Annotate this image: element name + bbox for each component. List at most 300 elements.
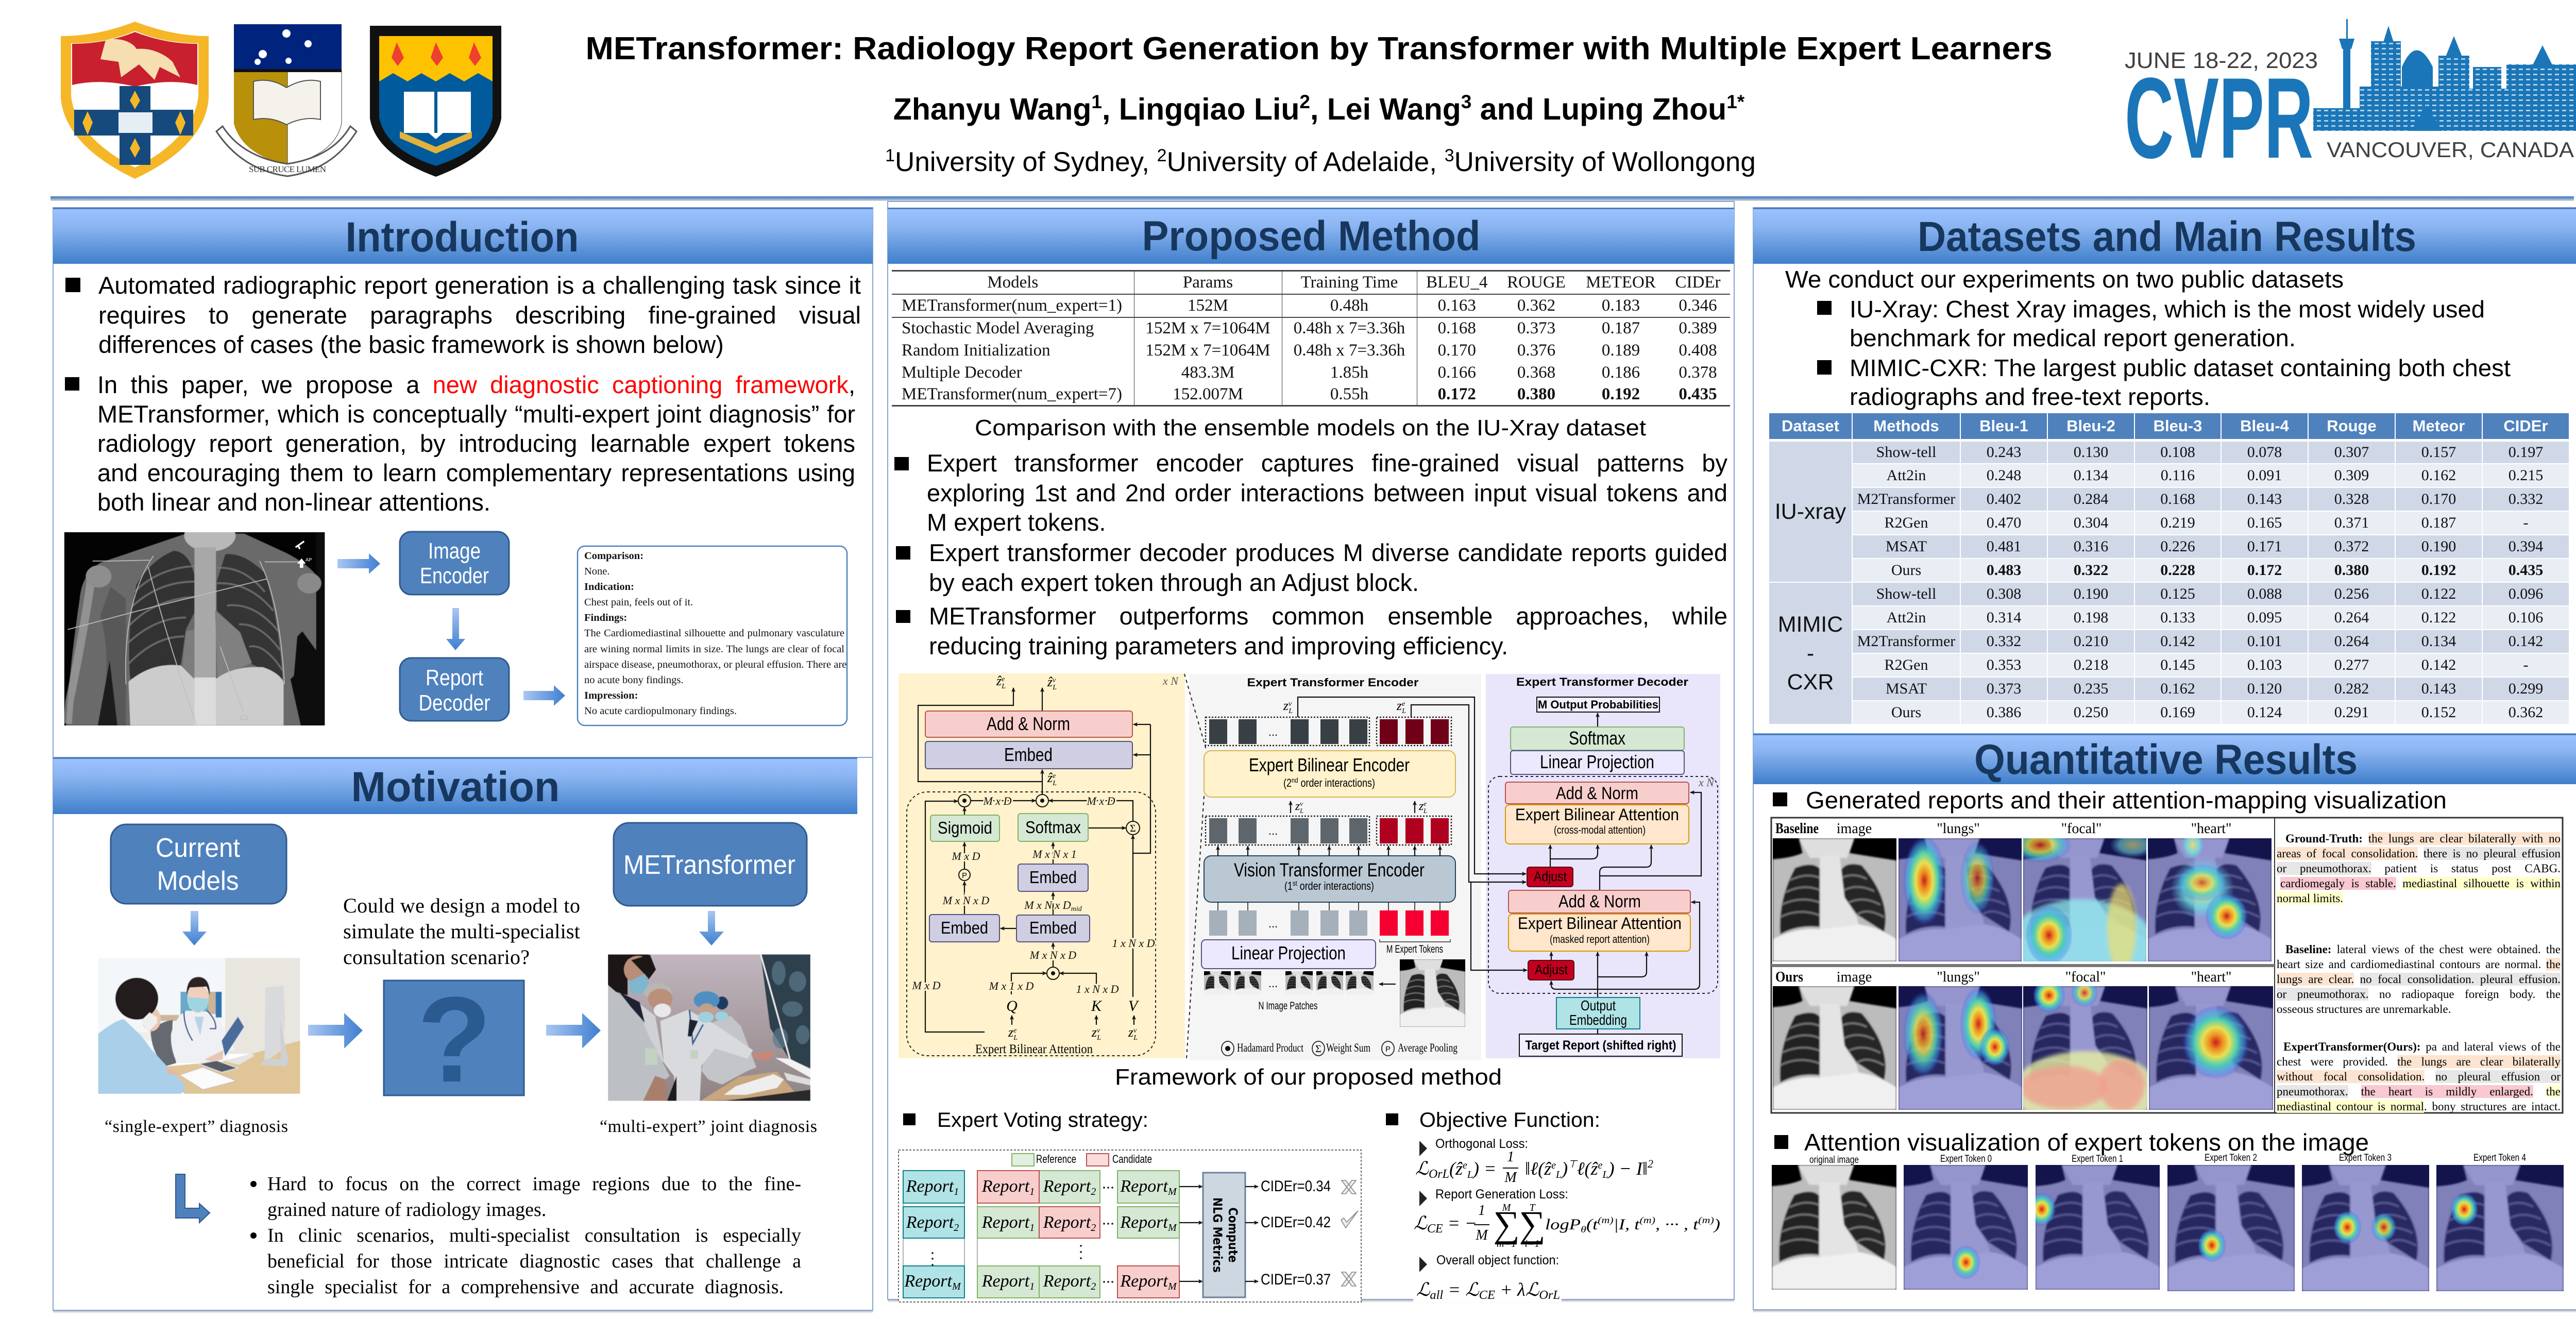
panel: Expert Bilinear Attention detail: z bbox=[1128, 1025, 1133, 1040]
table: main results: 0.171 bbox=[2247, 538, 2282, 555]
formula: orthogonal loss: ) = bbox=[1472, 1158, 1496, 1179]
table: main results: Ours bbox=[1891, 704, 1921, 721]
heatmap: ours focal bbox=[2013, 978, 2158, 1128]
panel: Expert Transformer Encoder: M Expert Tokens bbox=[1386, 943, 1443, 955]
table: main results: 0.130 bbox=[2074, 444, 2108, 461]
text block: problem statement: Automated radiographic report generation is a challenging task since it bbox=[98, 272, 861, 299]
table: ensemble comparison: 0.435 bbox=[1679, 385, 1717, 403]
text: ours report: pneumothorax. the heart is mildly enlarged. the bbox=[2277, 1085, 2561, 1098]
table: main results: 0.386 bbox=[1987, 704, 2021, 721]
table: main results: Methods bbox=[1873, 417, 1939, 435]
table: ensemble comparison: 0.186 bbox=[1602, 363, 1640, 381]
formula: report generation loss: , ··· , t bbox=[1655, 1216, 1699, 1233]
box: unknown model question mark bbox=[384, 972, 524, 1108]
table: main results: R2Gen bbox=[1885, 656, 1928, 673]
table: ensemble comparison: 0.373 bbox=[1517, 319, 1555, 337]
table: main results: 0.228 bbox=[2160, 562, 2195, 579]
figure: expert token attention: Expert Token 2 bbox=[2205, 1153, 2257, 1163]
text: ground-truth report: or pneumothorax. patient is status post CABG. bbox=[2277, 862, 2561, 875]
text: ours report: without focal consolidation. no pleural effusion or bbox=[2277, 1070, 2561, 1083]
panel: Expert Transformer Encoder: z bbox=[1295, 800, 1300, 813]
table: ensemble comparison: METransformer(num_expert=7) bbox=[902, 385, 1122, 403]
text: intro sentence: We conduct our experiments on two public datasets bbox=[1785, 266, 2344, 293]
formula: report generation loss: ∑ bbox=[1493, 1204, 1520, 1245]
text block: proposal: and encouraging them to learn complementary representations using bbox=[97, 459, 855, 486]
panel: Introduction bbox=[53, 208, 873, 757]
heading: Datasets and Main Results: Datasets and Main Results bbox=[1918, 213, 2416, 260]
panel: Expert Transformer Encoder: L bbox=[1288, 707, 1293, 715]
box: Current Models: Models bbox=[157, 866, 239, 896]
affiliations: University of Adelaide, bbox=[1167, 147, 1445, 177]
box: Image Encoder: Image bbox=[428, 538, 481, 564]
text: baseline report: Baseline: lateral views of the chest were obtained. the bbox=[2285, 943, 2561, 956]
table: main results: 0.308 bbox=[1987, 585, 2021, 602]
heading: Proposed Method bbox=[888, 208, 1734, 264]
bullet icon bbox=[1773, 792, 1787, 806]
panel: Expert Bilinear Attention detail: x N bbox=[1162, 674, 1179, 687]
text block: proposal: radiology report generation, by introducing learnable expert tokens bbox=[97, 430, 855, 457]
diagram: expert voting: M bbox=[952, 1281, 961, 1292]
table: main results: IU-xray bbox=[1775, 499, 1846, 524]
table: main results: 0.197 bbox=[2509, 444, 2543, 461]
table: main results: 0.248 bbox=[1987, 467, 2021, 484]
table: main results: Ours bbox=[1891, 562, 1921, 579]
text block: problem statement: differences of cases (the basic framework is shown below) bbox=[98, 331, 724, 358]
heatmap: baseline lungs bbox=[1899, 838, 2022, 961]
table: main results: 0.125 bbox=[2160, 585, 2195, 602]
authors: , Lei Wang bbox=[1310, 92, 1461, 126]
formula: overall: OrL bbox=[1539, 1289, 1560, 1302]
table: ensemble comparison: Stochastic Model Averaging bbox=[902, 319, 1094, 337]
panel: Expert Transformer Encoder: ... bbox=[1268, 824, 1278, 837]
panel: Expert Transformer Encoder: Weight Sum bbox=[1326, 1041, 1370, 1054]
table: ensemble comparison: 0.48h x 7=3.36h bbox=[1294, 341, 1405, 360]
text: baseline report: lungs are clear. no focal consolidation. pleural effusion. bbox=[2277, 973, 2561, 986]
text block: expert decoder: Expert transformer decoder produces M diverse candidate reports guided bbox=[929, 539, 1727, 566]
formula: orthogonal loss bbox=[1415, 1149, 1653, 1186]
panel: Expert Bilinear Attention detail: e bbox=[1002, 675, 1005, 683]
table: main results: 0.145 bbox=[2160, 656, 2195, 673]
heading: Introduction: Introduction bbox=[345, 214, 579, 261]
text block: proposal: In this paper, we propose a new diagnostic captioning framework, bbox=[97, 371, 855, 398]
text block: IU-Xray: benchmark for medical report generation. bbox=[1850, 325, 2296, 351]
panel: Expert Transformer Decoder: Expert Bilinear Attention bbox=[1515, 805, 1679, 824]
heatmap: expert token 0 bbox=[1904, 1165, 2028, 1290]
table: ensemble comparison: 0.172 bbox=[1438, 385, 1476, 403]
panel: Expert Transformer Decoder: Expert Transformer Decoder bbox=[1516, 675, 1688, 688]
title: METransformer: Radiology Report Generation by Transformer with Multiple Expert Learners bbox=[585, 31, 2053, 66]
arrow bbox=[182, 911, 207, 945]
diagram: expert voting: 2 bbox=[1091, 1222, 1096, 1233]
image: ours chest x-ray bbox=[1773, 986, 1896, 1110]
panel: Expert Bilinear Attention detail: v bbox=[1133, 1027, 1137, 1035]
table: main results: 0.218 bbox=[2074, 656, 2108, 673]
caption: multi-expert: “multi-expert” joint diagnosis bbox=[600, 1117, 817, 1136]
formula: orthogonal loss: L bbox=[1602, 1169, 1608, 1180]
table: main results: 0.157 bbox=[2421, 444, 2456, 461]
formula: orthogonal loss: ℒ bbox=[1415, 1158, 1429, 1179]
affiliations: 1 bbox=[885, 146, 895, 165]
icon: wrong mark bbox=[1342, 1180, 1356, 1194]
diagram: expert voting: Report bbox=[982, 1272, 1029, 1291]
bullet icon bbox=[1817, 360, 1832, 375]
table: main results: 0.316 bbox=[2074, 538, 2108, 555]
table: main results: 0.371 bbox=[2334, 514, 2369, 531]
figure: attention maps and reports: image bbox=[1837, 969, 1872, 985]
table: main results: - bbox=[2523, 656, 2529, 673]
table: main results: 0.168 bbox=[2160, 491, 2195, 508]
table: ensemble comparison: 0.346 bbox=[1679, 296, 1717, 314]
logo: University of Wollongong crest bbox=[370, 26, 501, 177]
bullet list: motivation points: Hard to focus on the correct image regions due to the fine- bbox=[267, 1173, 801, 1195]
affiliations: University of Sydney, bbox=[895, 147, 1157, 177]
formula: orthogonal loss: M bbox=[1504, 1170, 1517, 1186]
panel: Expert Transformer Encoder: L bbox=[1423, 807, 1427, 815]
text block: MIMIC-CXR: radiographs and free-text reports. bbox=[1850, 383, 2210, 410]
panel: Expert Transformer Encoder: st bbox=[1293, 879, 1297, 887]
panel: Expert Bilinear Attention detail: ẑ bbox=[1047, 770, 1053, 785]
panel: Expert Bilinear Attention detail: mid bbox=[1071, 905, 1082, 913]
diagram: expert voting: 1 bbox=[1029, 1222, 1035, 1233]
formula: report generation loss: ) bbox=[1713, 1216, 1720, 1233]
bullet icon bbox=[65, 278, 80, 292]
table: main results: MSAT bbox=[1886, 680, 1927, 697]
table: ensemble comparison: 0.378 bbox=[1679, 363, 1717, 381]
table: ensemble comparison: 483.3M bbox=[1181, 363, 1234, 381]
table: main results: 0.162 bbox=[2421, 467, 2456, 484]
authors: and Luping Zhou bbox=[1471, 92, 1726, 126]
table: main results: 0.122 bbox=[2421, 609, 2456, 626]
table: main results: 0.120 bbox=[2247, 680, 2282, 697]
caption: framework: Framework of our proposed method bbox=[1115, 1064, 1502, 1090]
table: ensemble comparison: Models bbox=[987, 273, 1038, 292]
panel: Expert Bilinear Attention detail: ẑ bbox=[996, 673, 1002, 688]
table: ensemble comparison: 0.368 bbox=[1517, 363, 1555, 381]
table: ensemble comparison: METEOR bbox=[1586, 273, 1656, 292]
text: ground-truth report: areas of focal consolidation. there is no pleural effusion bbox=[2277, 847, 2561, 860]
card: sample report: no acute bony findings. bbox=[584, 674, 683, 686]
text: ground-truth report: normal limits. bbox=[2277, 892, 2343, 905]
text block: proposal: METransformer, which is conceptually “multi-expert joint diagnosis” for bbox=[97, 400, 855, 428]
card: sample report: No acute cardiopulmonary findings. bbox=[584, 705, 737, 717]
text: baseline report: osseous structures are unremarkable. bbox=[2277, 1003, 2451, 1016]
formula: report generation loss: logP bbox=[1545, 1216, 1574, 1233]
conference logo: CVPR 2023 bbox=[2125, 19, 2576, 182]
panel: Expert Transformer Encoder: Expert Bilinear Encoder bbox=[1249, 754, 1410, 775]
table: main results: 0.402 bbox=[1987, 491, 2021, 508]
table: main results: 0.210 bbox=[2074, 633, 2108, 650]
diagram: expert voting: Candidate bbox=[1112, 1153, 1152, 1165]
formula: report generation loss: CE bbox=[1427, 1222, 1443, 1236]
heatmap: baseline heart bbox=[2148, 838, 2272, 961]
diagram: expert voting: 1 bbox=[1029, 1281, 1035, 1292]
panel: Expert Transformer Encoder bbox=[1189, 674, 1481, 1060]
panel: Expert Transformer Decoder: Linear Projection bbox=[1540, 751, 1654, 772]
table: main results: 0.373 bbox=[1987, 680, 2021, 697]
panel: Quantitative Results bbox=[1753, 734, 2576, 1310]
diagram: expert voting: CIDEr=0.37 bbox=[1261, 1271, 1331, 1288]
table: main results bbox=[1768, 412, 2570, 726]
authors: 3 bbox=[1461, 91, 1471, 112]
table: main results: 0.165 bbox=[2247, 514, 2282, 531]
text: ours report: chest were provided. the lungs are clear bilaterally bbox=[2277, 1055, 2561, 1068]
formula: report generation loss: (m) bbox=[1598, 1215, 1614, 1226]
diagram: expert voting: 2 bbox=[954, 1222, 959, 1233]
table: main results: 0.103 bbox=[2247, 656, 2282, 673]
table: main results: 0.095 bbox=[2247, 609, 2282, 626]
box: unknown model question mark: ? bbox=[417, 972, 492, 1108]
heatmap: expert token 2 bbox=[2167, 1165, 2295, 1291]
heading: Quantitative Results bbox=[1753, 734, 2576, 784]
diagram: expert voting: Report bbox=[1120, 1177, 1168, 1196]
authors: 1 bbox=[1091, 91, 1102, 112]
panel: Expert Bilinear Attention detail: M x 1 x D bbox=[989, 979, 1033, 992]
diagram: expert voting: M bbox=[1167, 1222, 1177, 1233]
conference logo: CVPR 2023: VANCOUVER, CANADA bbox=[2327, 138, 2574, 162]
panel: Expert Transformer Encoder: Vision Transformer Encoder bbox=[1234, 859, 1425, 881]
panel: Expert Bilinear Attention detail: v bbox=[1097, 1027, 1100, 1035]
panel: Expert Bilinear Attention detail: K bbox=[1091, 997, 1103, 1014]
table: main results: 0.380 bbox=[2334, 562, 2369, 579]
panel: Expert Bilinear Attention detail: M x N x 1 bbox=[1032, 848, 1077, 860]
heading: Objective Function: Objective Function: bbox=[1419, 1109, 1600, 1131]
text block: proposal: both linear and non-linear attentions. bbox=[97, 488, 490, 516]
diagram: expert voting: 1 bbox=[1029, 1186, 1035, 1197]
table: main results: 0.282 bbox=[2334, 680, 2369, 697]
table: main results: 0.394 bbox=[2509, 538, 2543, 555]
panel: Expert Bilinear Attention detail: v bbox=[1053, 677, 1056, 684]
table: main results: Bleu-1 bbox=[1979, 417, 2028, 435]
text: ground-truth report: cardiomegaly is stable. mediastinal silhouette is within bbox=[2280, 877, 2561, 890]
diagram: expert voting: Report bbox=[982, 1213, 1029, 1232]
panel: Expert Transformer Decoder: Adjust bbox=[1535, 962, 1568, 977]
table: main results: 0.108 bbox=[2160, 444, 2195, 461]
heading: Quantitative Results: Quantitative Results bbox=[1974, 736, 2358, 783]
label: Orthogonal Loss bbox=[1419, 1137, 1528, 1156]
table: ensemble comparison: CIDEr bbox=[1675, 273, 1720, 292]
white backing for overall formula bbox=[1413, 1278, 1562, 1302]
label: Report Generation Loss: Report Generation Loss: bbox=[1435, 1187, 1568, 1202]
panel: Expert Transformer Decoder: (cross-modal attention) bbox=[1554, 824, 1646, 836]
card: sample report: Chest pain, feels out of it. bbox=[584, 597, 693, 608]
panel: Expert Transformer Decoder bbox=[1298, 674, 1720, 1058]
table: main results: - bbox=[1807, 641, 1814, 666]
box: Current Models bbox=[111, 824, 286, 904]
table: ensemble comparison: 152M x 7=1064M bbox=[1145, 341, 1270, 360]
card: sample report: airspace disease, pneumothorax, or pleural effusion. There are bbox=[584, 659, 846, 670]
table: main results: Bleu-4 bbox=[2240, 417, 2289, 435]
table: ensemble comparison: 0.183 bbox=[1602, 296, 1640, 314]
table: ensemble comparison: 0.166 bbox=[1438, 363, 1476, 381]
diagram: expert voting: 1 bbox=[954, 1186, 959, 1197]
image: baseline chest x-ray bbox=[1773, 838, 1896, 961]
table: main results: 0.243 bbox=[1987, 444, 2021, 461]
formula: orthogonal loss: ‖ℓ(ẑ bbox=[1525, 1158, 1551, 1179]
figure: expert token attention: Expert Token 0 bbox=[1940, 1154, 1992, 1164]
panel: Expert Bilinear Attention detail: z bbox=[1008, 1025, 1013, 1040]
arrow bbox=[523, 685, 565, 706]
panel: Expert Transformer Decoder: Add & Norm bbox=[1558, 892, 1641, 911]
figure: expert token attention: Expert Token 3 bbox=[2339, 1153, 2392, 1163]
table: ensemble comparison: 0.192 bbox=[1602, 385, 1640, 403]
table: main results: 0.304 bbox=[2074, 514, 2108, 531]
panel: Expert Transformer Decoder: M Output Probabilities bbox=[1538, 698, 1658, 711]
table: main results: 0.088 bbox=[2247, 585, 2282, 602]
table: main results: 0.328 bbox=[2334, 491, 2369, 508]
formula: report generation loss: i=1 bbox=[1524, 1238, 1540, 1249]
bullet icon bbox=[903, 1113, 916, 1125]
bullet icon bbox=[1386, 1113, 1398, 1125]
table: ensemble comparison: 0.168 bbox=[1438, 319, 1476, 337]
text block: expert encoder bbox=[927, 448, 1731, 538]
formula: report generation loss: θ bbox=[1581, 1224, 1586, 1235]
panel: Expert Bilinear Attention detail: Embed bbox=[941, 918, 988, 937]
text block: expert encoder: Expert transformer encoder captures fine-grained visual patterns by bbox=[927, 449, 1727, 477]
table: main results: 0.142 bbox=[2421, 656, 2456, 673]
caption: single-expert: “single-expert” diagnosis bbox=[105, 1117, 288, 1136]
arrow bbox=[546, 1013, 601, 1049]
panel: Expert Transformer Decoder: Adjust bbox=[1534, 869, 1567, 884]
table: main results: 0.332 bbox=[2509, 491, 2543, 508]
heading: Introduction bbox=[53, 208, 873, 264]
panel: Expert Bilinear Attention detail: Embed bbox=[1029, 868, 1077, 887]
panel: Expert Transformer Encoder: ... bbox=[1268, 917, 1278, 930]
box: METransformer bbox=[614, 823, 807, 906]
panel: Expert Transformer Decoder: x N bbox=[1698, 776, 1715, 789]
panel: Expert Transformer Decoder: Add & Norm bbox=[1556, 784, 1638, 803]
figure: attention maps and reports: Baseline bbox=[1775, 821, 1819, 837]
panel: Expert Bilinear Attention detail: e bbox=[1013, 1027, 1016, 1035]
text: baseline report bbox=[2277, 942, 2562, 1019]
text: ours report bbox=[2277, 1039, 2562, 1117]
table: main results: 0.226 bbox=[2160, 538, 2195, 555]
arrow bbox=[699, 911, 724, 945]
text: baseline report: heart size and cardiomediastinal contours are normal. the bbox=[2277, 958, 2561, 971]
heading: Datasets and Main Results bbox=[1753, 208, 2576, 264]
heading: Motivation: Motivation bbox=[351, 764, 560, 810]
table: main results: Bleu-2 bbox=[2066, 417, 2115, 435]
heatmap: expert token 1 bbox=[2027, 1165, 2160, 1290]
diagram: expert voting: Report bbox=[1043, 1177, 1091, 1196]
panel: Expert Transformer Encoder: Expert Transformer Encoder bbox=[1247, 676, 1419, 689]
affiliations: 2 bbox=[1157, 146, 1167, 165]
panel: Expert Transformer Encoder: z bbox=[1283, 698, 1289, 713]
panel: Expert Bilinear Attention detail: L bbox=[1133, 1034, 1138, 1042]
logo: University of Sydney crest bbox=[61, 22, 209, 179]
table: ensemble comparison: 0.55h bbox=[1330, 385, 1368, 403]
figure: attention maps and reports bbox=[1771, 818, 2563, 1128]
panel: Expert Transformer Encoder: (2 bbox=[1283, 776, 1294, 789]
formula: overall: all bbox=[1430, 1289, 1444, 1302]
panel: Expert Transformer Encoder: e bbox=[1402, 700, 1405, 708]
table: main results: M2Transformer bbox=[1857, 491, 1955, 508]
panel: Expert Bilinear Attention detail: M x D bbox=[952, 850, 980, 863]
bullet icon bbox=[896, 610, 910, 623]
panel: Expert Bilinear Attention detail: M x N x D bbox=[1024, 899, 1071, 911]
panel: Expert Bilinear Attention detail: L bbox=[1052, 684, 1057, 691]
table: ensemble comparison: METransformer(num_expert=1) bbox=[902, 296, 1122, 314]
image: single doctor consultation bbox=[98, 958, 300, 1094]
caption: comparison table: Comparison with the ensemble models on the IU-Xray dataset bbox=[975, 415, 1646, 441]
panel: Expert Transformer Encoder: (1 bbox=[1284, 880, 1295, 892]
figure: attention maps and reports: Ours bbox=[1775, 969, 1803, 985]
table: main results: 0.284 bbox=[2074, 491, 2108, 508]
table: main results: 0.250 bbox=[2074, 704, 2108, 721]
panel: Expert Bilinear Attention detail: ẑ bbox=[1047, 674, 1053, 689]
panel: Expert Bilinear Attention detail: M x N x D bbox=[1029, 949, 1076, 961]
text block: MIMIC-CXR bbox=[1850, 354, 2511, 410]
formula: report generation loss: (t bbox=[1586, 1216, 1598, 1233]
table: main results: 0.172 bbox=[2247, 562, 2282, 579]
panel: Expert Transformer Encoder: v bbox=[1289, 700, 1292, 708]
text block: proposal bbox=[97, 370, 860, 519]
panel: Expert Bilinear Attention detail: Sigmoid bbox=[938, 818, 992, 837]
bullet list: motivation points: beneficial for those intricate diagnostic cases that challenge a bbox=[267, 1250, 801, 1272]
panel: Expert Bilinear Attention detail: z bbox=[1092, 1025, 1097, 1040]
table: main results: 0.299 bbox=[2509, 680, 2543, 697]
table: main results: 0.190 bbox=[2074, 585, 2108, 602]
table: ensemble comparison: 152M x 7=1064M bbox=[1145, 319, 1270, 337]
text: ground-truth report bbox=[2277, 831, 2562, 908]
panel: Expert Bilinear Attention detail: L bbox=[1096, 1034, 1101, 1042]
formula: overall: + λℒ bbox=[1495, 1279, 1539, 1300]
label: Report Generation Loss bbox=[1419, 1187, 1568, 1206]
heatmap: baseline focal bbox=[2023, 838, 2146, 961]
panel: Expert Bilinear Attention detail: Q bbox=[1006, 997, 1018, 1014]
figure: attention maps and reports: "focal" bbox=[2065, 969, 2106, 985]
text block: research question bbox=[343, 894, 580, 969]
text block: research question: Could we design a model to bbox=[343, 894, 580, 917]
panel: Expert Transformer Encoder: order interactions) bbox=[1298, 776, 1375, 789]
text block: IU-Xray: IU-Xray: Chest Xray images, which is the most widely used bbox=[1850, 296, 2485, 323]
table: ensemble comparison: 0.187 bbox=[1602, 319, 1640, 337]
panel: Expert Transformer Encoder: Σ bbox=[1315, 1043, 1321, 1055]
text block: MIMIC-CXR: MIMIC-CXR: The largest public dataset containing both chest bbox=[1850, 354, 2511, 381]
panel: Expert Transformer Encoder: Average Pooling bbox=[1398, 1041, 1458, 1054]
table: main results: Show-tell bbox=[1876, 444, 1936, 461]
image: multi-specialist consultation bbox=[608, 954, 810, 1101]
table: ensemble comparison: ROUGE bbox=[1507, 273, 1566, 292]
arrow bbox=[308, 1013, 363, 1049]
table: main results: 0.314 bbox=[1987, 609, 2021, 626]
panel: Expert Transformer Decoder: Output bbox=[1581, 997, 1616, 1013]
conference logo: CVPR 2023: CVPR bbox=[2125, 54, 2313, 182]
panel: Expert Transformer Encoder: ... bbox=[1268, 725, 1278, 738]
table: main results: 0.143 bbox=[2421, 680, 2456, 697]
table: main results: 0.134 bbox=[2421, 633, 2456, 650]
formula: overall: ℒ bbox=[1416, 1279, 1430, 1300]
table: main results: 0.353 bbox=[1987, 656, 2021, 673]
authors: Zhanyu Wang bbox=[893, 92, 1091, 126]
formula: orthogonal loss: L bbox=[1467, 1169, 1473, 1180]
text: ground-truth report: Ground-Truth: the lungs are clear bilaterally with no bbox=[2285, 832, 2561, 845]
text block: expert encoder: M expert tokens. bbox=[927, 509, 1106, 536]
text block: problem statement: requires to generate paragraphs describing fine-grained visual bbox=[98, 301, 861, 329]
table: main results: 0.116 bbox=[2161, 467, 2195, 484]
card: sample report: Impression: bbox=[584, 690, 638, 701]
formula: orthogonal loss: L bbox=[1555, 1169, 1562, 1180]
table: main results: 0.470 bbox=[1987, 514, 2021, 531]
arrow bbox=[446, 608, 465, 650]
diagram: expert voting: Compute bbox=[1226, 1208, 1240, 1262]
bullet list: motivation points: single specialist for a comprehensive and accurate diagnosis. bbox=[267, 1276, 784, 1298]
table: main results: 0.143 bbox=[2247, 491, 2282, 508]
formula: orthogonal loss: (ẑ bbox=[1449, 1158, 1463, 1179]
figure: attention maps and reports: "heart" bbox=[2191, 969, 2231, 985]
panel: Expert Bilinear Attention detail: Softmax bbox=[1025, 818, 1081, 837]
text block: problem statement bbox=[98, 270, 866, 361]
table: main results: 0.215 bbox=[2509, 467, 2543, 484]
